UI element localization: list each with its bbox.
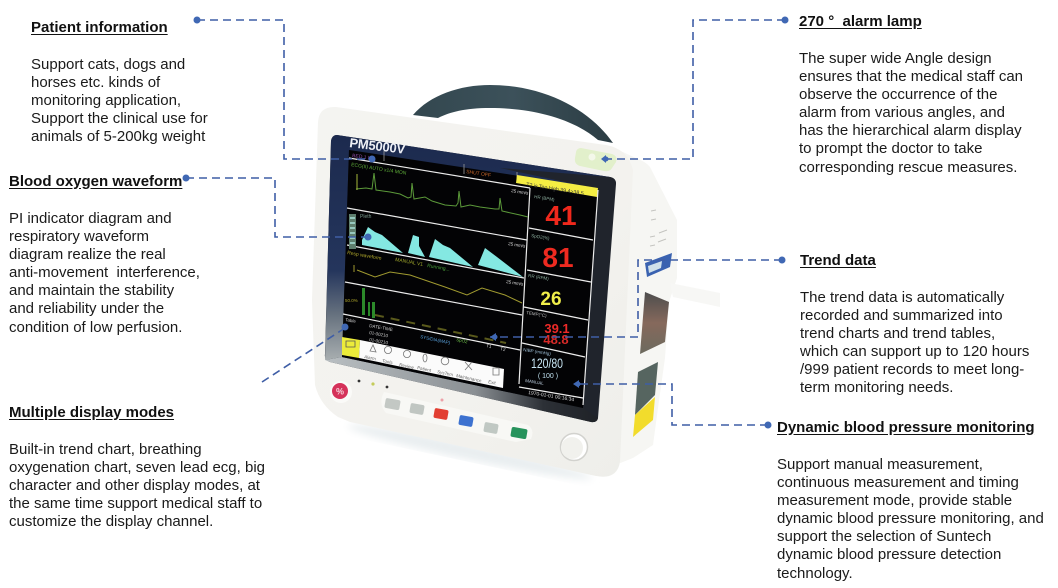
description: blood oxygen waveform: respiratory waveform xyxy=(9,228,149,245)
icon: carrying handle xyxy=(413,85,613,143)
respiration waveform: Resp waveform xyxy=(347,250,382,262)
description: blood oxygen waveform xyxy=(9,210,200,336)
menu bar: Alarm xyxy=(364,354,377,361)
ECG waveform: ECG(II) AUTO x1/4 MON xyxy=(351,162,407,177)
description: dynamic blood pressure monitoring: dynamic blood pressure detection xyxy=(777,546,1001,563)
bezel left blue band xyxy=(325,135,610,360)
respiration waveform: 25 mm/s xyxy=(506,279,524,287)
description: blood oxygen waveform: PI indicator diagram and xyxy=(9,210,172,227)
vital readouts: 120/80 xyxy=(531,355,563,371)
monitor screen: NIBP (mmHg) xyxy=(523,347,552,356)
paper tab xyxy=(670,283,720,307)
trend table: T2 xyxy=(500,346,506,352)
text block: trend data xyxy=(800,252,1029,396)
menu bar: Review xyxy=(399,362,415,370)
connector: patient information xyxy=(197,20,372,159)
menu bar: SysTem xyxy=(437,369,454,377)
monitor screen: 1970-01-01 00:16:34 xyxy=(528,390,575,403)
trend table: 01-00210 xyxy=(369,337,389,345)
description: dynamic blood pressure monitoring: Support manual measurement, xyxy=(777,456,983,473)
trend table: SYS/DIA(MAP) xyxy=(420,334,451,345)
brand name: PM5000V xyxy=(349,135,406,157)
capnography bars: 50.0% xyxy=(345,298,358,303)
description: blood oxygen waveform: and maintain the stability xyxy=(9,282,174,299)
description: alarm lamp: ensures that the medical staff can xyxy=(799,68,1023,85)
text block: dynamic blood pressure monitoring xyxy=(777,418,1044,582)
screen bezel xyxy=(325,135,616,422)
text block: patient information xyxy=(31,18,208,145)
vital readouts: 81 xyxy=(542,242,574,273)
capnography bars xyxy=(345,288,506,343)
connector: alarm lamp xyxy=(603,20,785,159)
callout connectors xyxy=(186,20,785,425)
description: trend data xyxy=(800,289,1029,396)
heading: blood oxygen waveform: Blood oxygen waveform xyxy=(9,172,182,190)
description: alarm lamp: has the hierarchical alarm display xyxy=(799,122,1022,139)
ECG waveform: 25 mm/s xyxy=(511,188,529,196)
description: alarm lamp: The super wide Angle design xyxy=(799,50,992,67)
description: multiple display modes: Built-in trend chart, breathing xyxy=(9,441,202,458)
description: multiple display modes: customize the display channel. xyxy=(9,513,213,530)
trend table: Table xyxy=(345,317,357,324)
floor shadow xyxy=(346,418,594,486)
indicator LEDs xyxy=(358,380,360,382)
SpO2 plethysmograph waveform: 25 mm/s xyxy=(508,241,526,249)
monitor screen: HR (BPM) xyxy=(534,194,555,202)
description: dynamic blood pressure monitoring xyxy=(777,456,1044,582)
side housing xyxy=(590,146,677,475)
monitor screen: RR (RPM) xyxy=(528,273,550,281)
description: alarm lamp: to prompt the doctor to take xyxy=(799,140,982,157)
description: dynamic blood pressure monitoring: continuous measurement and timing xyxy=(777,474,1019,491)
description: blood oxygen waveform: diagram realize the real xyxy=(9,246,166,263)
monitor front body xyxy=(312,107,633,477)
description: patient information xyxy=(31,56,208,145)
vital readouts: 48.8 xyxy=(543,332,569,347)
description: blood oxygen waveform: anti-movement interference, xyxy=(9,264,200,281)
bezel silver lower strip xyxy=(325,357,598,422)
connector: blood pressure xyxy=(575,384,768,425)
description: dynamic blood pressure monitoring: dynamic blood pressure monitoring, and xyxy=(777,510,1044,527)
connector end markers xyxy=(182,16,788,428)
description: patient information: animals of 5-200kg weight xyxy=(31,128,205,145)
description: dynamic blood pressure monitoring: measurement mode, provide stable xyxy=(777,492,1012,509)
description: trend data: which can support up to 120 hours xyxy=(800,343,1029,360)
description: trend data: The trend data is automatically xyxy=(800,289,1004,306)
hard keys xyxy=(384,398,401,410)
description: patient information: Support the clinical use for xyxy=(31,110,208,127)
description: multiple display modes xyxy=(9,441,265,530)
menu bar: Maintenance xyxy=(456,373,483,383)
yellow alarm message xyxy=(516,175,598,197)
description: multiple display modes: oxygenation chart, seven lead ecg, big xyxy=(9,459,265,476)
text block: multiple display modes xyxy=(9,404,265,530)
description: alarm lamp: observe the occurrence of the xyxy=(799,86,997,103)
respiration waveform xyxy=(347,250,524,303)
waveform dividers xyxy=(343,158,598,405)
description: trend data: term monitoring needs. xyxy=(800,379,953,396)
description: alarm lamp: corresponding rescue measures. xyxy=(799,159,1017,176)
heading: multiple display modes: Multiple display modes xyxy=(9,404,174,420)
connector: multiple display modes xyxy=(262,328,345,382)
rotary knob xyxy=(560,434,588,460)
trend table: 01-00210 xyxy=(369,330,389,338)
heading: dynamic blood pressure monitoring: Dynamic blood pressure monitoring xyxy=(777,418,1035,436)
menu bar xyxy=(342,337,504,388)
description: patient information: horses etc. kinds of xyxy=(31,74,160,91)
vital readouts: 41 xyxy=(545,200,577,231)
trend table: DATE-TIME xyxy=(369,323,393,332)
monitor screen: SpO2(%) xyxy=(531,233,550,241)
heading: patient information: Patient information xyxy=(31,18,168,36)
description: patient information: monitoring application, xyxy=(31,92,181,109)
description: dynamic blood pressure monitoring: support the selection of Suntech xyxy=(777,528,991,545)
icon: alarm lamp xyxy=(575,148,616,171)
monitor screen: TEMP(°C) xyxy=(526,310,547,318)
description: blood oxygen waveform: condition of low perfusion. xyxy=(9,319,182,336)
icon: blue sticker xyxy=(645,253,672,277)
status bar: SHUT OFF xyxy=(466,169,491,179)
status bar xyxy=(352,151,517,183)
heading: trend data: Trend data xyxy=(800,252,876,268)
trend table: SpO2 xyxy=(456,337,469,344)
control panel: % xyxy=(336,386,344,396)
connector: trend data xyxy=(490,260,782,337)
monitor screen xyxy=(342,150,598,408)
description: trend data: /999 patient records to meet long- xyxy=(800,361,1024,378)
icon: alarm silence button xyxy=(330,381,352,403)
trend table: T1 xyxy=(486,343,492,349)
heading: alarm lamp: 270 ° alarm lamp xyxy=(799,12,922,30)
menu bar: Patient xyxy=(417,365,432,373)
button tray xyxy=(381,392,532,442)
control panel xyxy=(330,380,588,460)
vital readouts xyxy=(531,200,577,380)
menu bar: Tools xyxy=(382,358,394,365)
vital readouts: ( 100 ) xyxy=(538,373,558,380)
vital readouts: 26 xyxy=(540,289,562,310)
description: multiple display modes: the same time support medical staff to xyxy=(9,495,262,512)
description: trend data: recorded and summarized into xyxy=(800,307,1003,324)
ECG waveform xyxy=(351,162,529,217)
description: dynamic blood pressure monitoring: technology. xyxy=(777,565,853,582)
warning labels xyxy=(635,362,658,415)
connector: blood oxygen waveform xyxy=(186,178,368,237)
text block: alarm lamp xyxy=(799,12,1023,176)
respiration waveform: Running... xyxy=(427,263,450,273)
text block: blood oxygen waveform xyxy=(9,172,200,336)
SpO2 plethysmograph waveform: Pleth xyxy=(360,214,372,220)
description: multiple display modes: character and other display modes, at xyxy=(9,477,260,494)
vital readouts: 39.1 xyxy=(544,321,570,336)
SpO2 plethysmograph waveform xyxy=(349,214,526,277)
trend table xyxy=(345,317,506,352)
description: patient information: Support cats, dogs and xyxy=(31,56,185,73)
respiration waveform: MANUAL V1 xyxy=(395,257,424,268)
description: alarm lamp: alarm from various angles, and xyxy=(799,104,1005,121)
description: trend data: trend charts and trend tables, xyxy=(800,325,995,342)
status bar: BED 1 ID xyxy=(352,153,374,162)
description: alarm lamp xyxy=(799,50,1023,176)
side vents xyxy=(650,210,667,246)
yellow alarm message: T2 is Too high 39.4>38.5 xyxy=(526,182,584,197)
menu bar: Exit xyxy=(488,379,497,386)
description: blood oxygen waveform: and reliability under the xyxy=(9,300,164,317)
monitor screen: MANUAL xyxy=(525,378,545,386)
printer slot xyxy=(640,292,669,354)
